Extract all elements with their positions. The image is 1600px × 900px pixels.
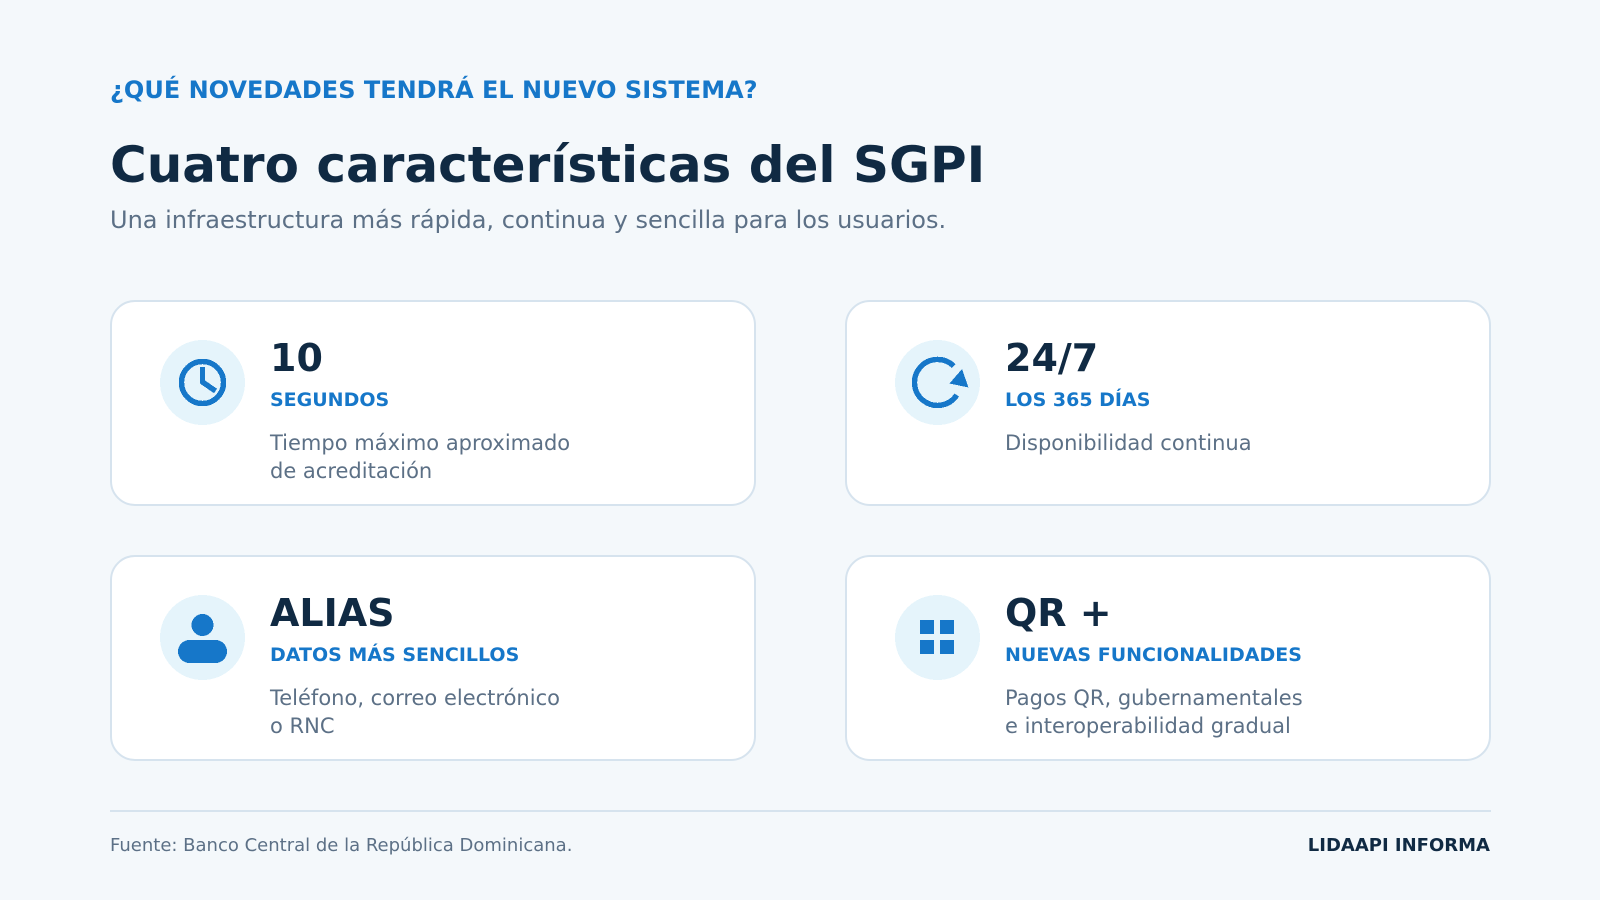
value: qr +: QR + [1005,591,1112,635]
label: datos más sencillos: DATOS MÁS SENCILLOS [270,643,519,666]
value: alias: ALIAS [270,591,395,635]
description: e interoperabilidad gradual [1005,714,1291,738]
brand credit: LIDAAPI INFORMA [1308,835,1490,856]
panel: 10 segundos [111,301,755,505]
description: Pagos QR, gubernamentales [1005,686,1303,710]
description: Teléfono, correo electrónico [269,686,560,710]
eyebrow heading: ¿QUÉ NOVEDADES TENDRÁ EL NUEVO SISTEMA? [110,75,758,104]
icon: person [160,595,245,680]
icon: refresh arrow [895,340,980,425]
description: Disponibilidad continua [1005,431,1252,455]
subtitle: Una infraestructura más rápida, continua y sencilla para los usuarios. [110,206,946,234]
value: 24/7: 24/7 [1005,336,1098,380]
label: segundos: SEGUNDOS [270,389,389,411]
description: o RNC [270,714,334,738]
panel: alias [111,556,755,760]
source note: Fuente: Banco Central de la República Dominicana. [110,835,572,856]
panel: 24/7 [846,301,1490,505]
description: de acreditación [270,459,432,483]
title: Cuatro características del SGPI [110,136,985,194]
icon: clock [160,340,245,425]
description: Tiempo máximo aproximado [269,431,570,455]
panel: qr [846,556,1490,760]
icon: qr grid [895,595,980,680]
value: 10: 10 [270,336,323,380]
label: nuevas funcionalidades: NUEVAS FUNCIONALIDADES [1005,644,1302,666]
label: los 365 días: LOS 365 DÍAS [1005,388,1150,411]
